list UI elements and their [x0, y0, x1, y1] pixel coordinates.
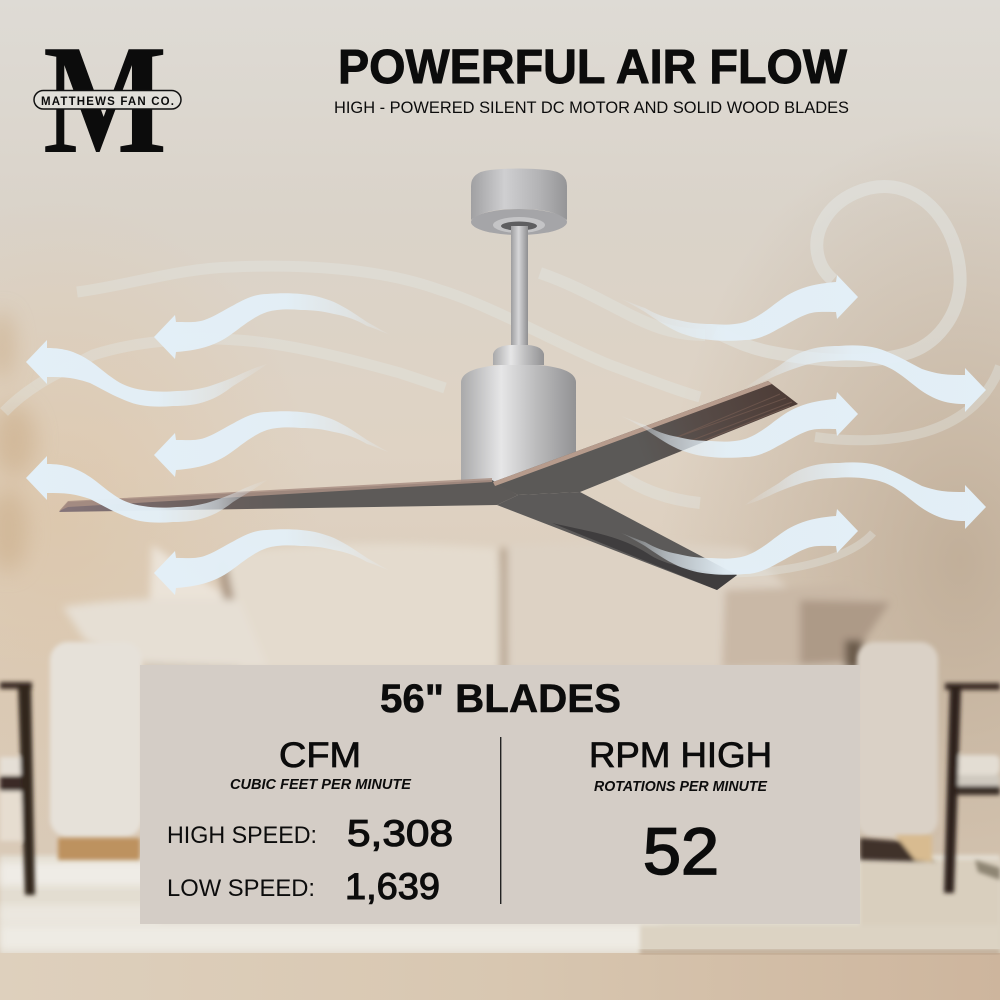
arrow left inner row 1 — [154, 293, 391, 359]
fan downrod — [511, 222, 528, 347]
air flow arrows: right — [621, 275, 986, 575]
blurred plant at left edge — [0, 311, 36, 572]
fan motor housing — [461, 365, 576, 482]
logo: Matthews Fan Co.: M — [43, 12, 167, 186]
air flow arrows: left — [26, 293, 391, 595]
panel heading: blade size: 56" BLADES — [380, 677, 621, 721]
fan motor collar — [493, 345, 544, 365]
RPM column: RPM HIGH — [589, 736, 772, 775]
column divider — [500, 737, 501, 904]
CFM column: HIGH SPEED: — [167, 822, 317, 849]
blurred right chair — [944, 683, 1000, 893]
fan blade: left — [59, 478, 518, 512]
arrow left inner row 3 — [154, 529, 391, 595]
sofa right arm — [857, 642, 938, 837]
ceiling fan — [59, 168, 798, 590]
panel: specifications — [140, 665, 860, 924]
sofa left arm — [50, 642, 142, 837]
subtitle: HIGH - POWERED SILENT DC MOTOR AND SOLID WOOD BLADES — [334, 98, 849, 117]
blurred left chair — [0, 682, 35, 895]
fan blade: right — [493, 381, 798, 495]
RPM column: 52 — [643, 814, 719, 888]
CFM column: 1,639 — [345, 866, 440, 907]
arrow right outer row 1 — [745, 345, 986, 412]
CFM column: LOW SPEED: — [167, 875, 315, 902]
CFM column: 5,308 — [347, 813, 453, 854]
arrow right inner row 1 — [621, 275, 858, 341]
RPM column: ROTATIONS PER MINUTE — [594, 779, 768, 795]
faint air swirls — [4, 187, 1000, 573]
arrow right inner row 3 — [621, 509, 858, 575]
CFM column: CFM — [279, 736, 361, 775]
arrow left row 2 — [26, 456, 267, 523]
arrow right outer row 2 — [745, 462, 986, 529]
arrow left row 1 — [26, 340, 267, 407]
carpet and floor — [0, 855, 1000, 1000]
fan ceiling canopy — [471, 168, 567, 246]
title: POWERFUL AIR FLOW — [338, 41, 848, 94]
sofa feet — [58, 835, 935, 862]
sofa back cushions — [63, 543, 890, 835]
arrow right inner row 2 — [621, 392, 858, 458]
CFM column: CUBIC FEET PER MINUTE — [230, 777, 412, 793]
blurred sofa — [50, 543, 938, 862]
RPM column — [589, 736, 772, 888]
logo: Matthews Fan Co.: MATTHEWS FAN CO. — [41, 96, 174, 108]
arrow left inner row 2 — [154, 411, 391, 477]
fan blade: lower — [497, 492, 737, 590]
CFM column — [167, 736, 453, 907]
